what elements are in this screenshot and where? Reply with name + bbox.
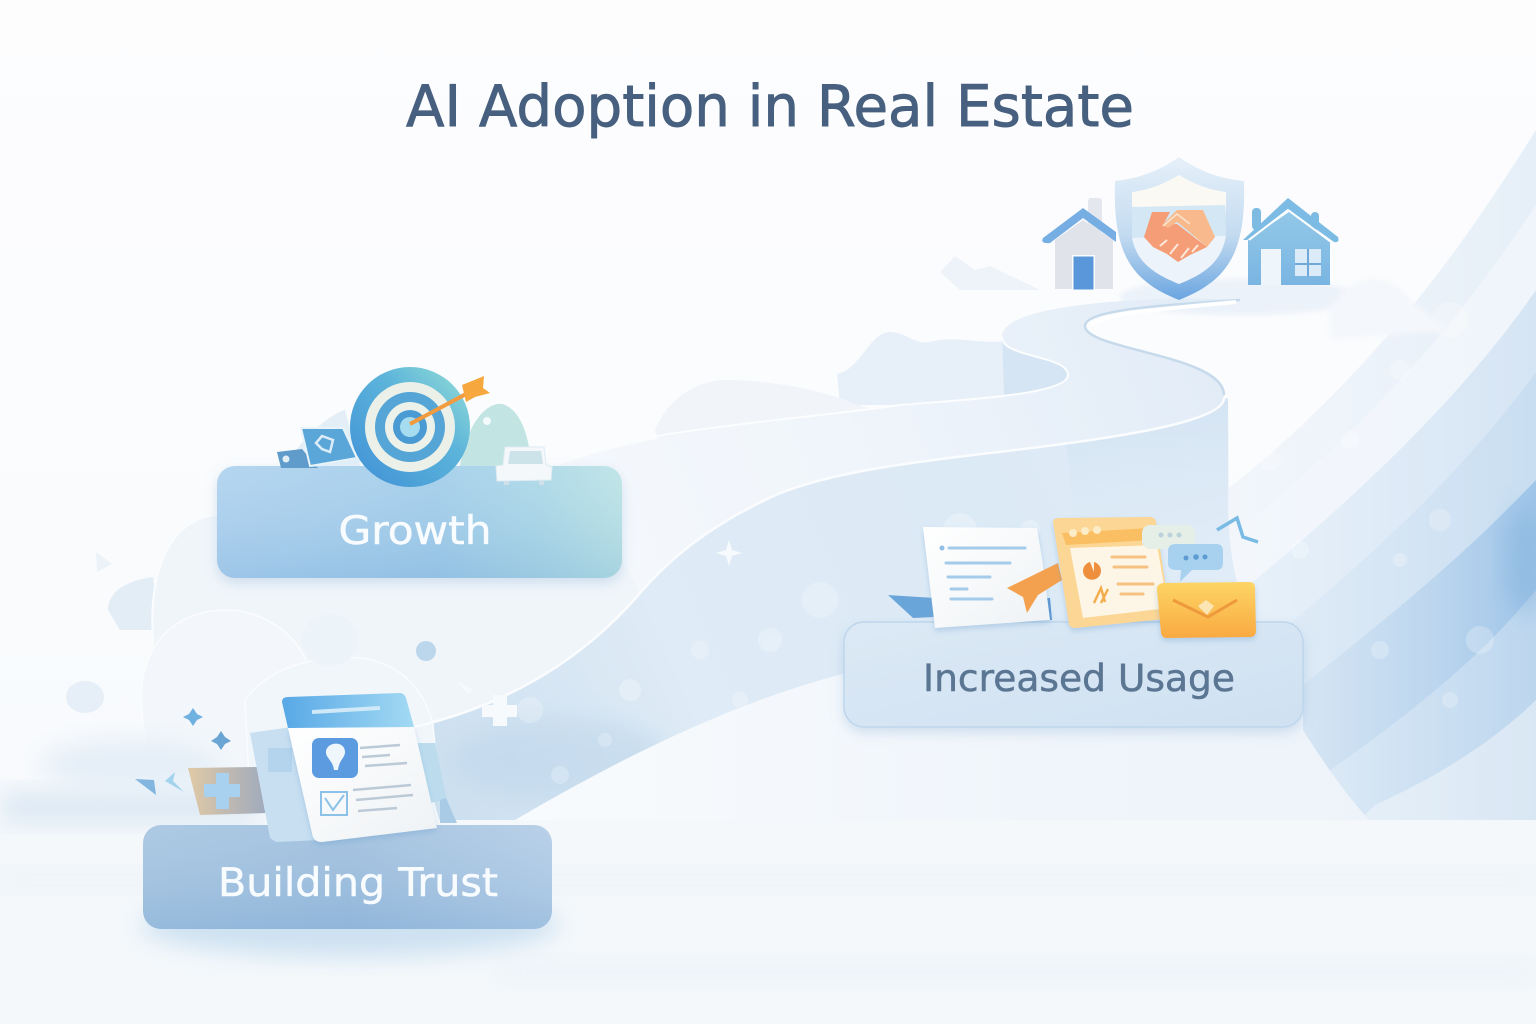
icon: arrows xyxy=(135,772,184,795)
hill and arch shapes on left xyxy=(66,480,640,800)
winding road xyxy=(414,298,1240,727)
faint sparkle and plus xyxy=(458,540,742,726)
icon: handshake xyxy=(1144,210,1215,262)
growth label: Growth xyxy=(338,509,492,554)
building trust label: Building Trust xyxy=(218,861,498,906)
panel: growth xyxy=(217,367,622,578)
title: AI Adoption in Real Estate xyxy=(406,74,1134,140)
left mist xyxy=(0,790,260,824)
icon: shield xyxy=(1115,157,1244,300)
pale ground xyxy=(0,820,1536,1024)
icon: hills behind target xyxy=(290,404,531,466)
icon: medical card xyxy=(188,767,267,815)
icon: sparkles xyxy=(183,708,231,750)
icon: browser window xyxy=(1053,517,1170,628)
distant clouds xyxy=(655,256,1450,445)
panel: increased usage xyxy=(844,517,1303,727)
road wall xyxy=(1066,398,1229,560)
icon: laptop and tag xyxy=(277,428,362,468)
panel: building trust xyxy=(135,693,560,957)
icon: envelope xyxy=(1157,582,1256,638)
icon: document with ribbon xyxy=(888,527,1062,628)
icon: houses and trust shield xyxy=(1042,157,1338,300)
small blue ball xyxy=(416,641,436,661)
lower pale road xyxy=(510,672,1372,823)
field darker mottled zone xyxy=(450,718,670,802)
usage label: Increased Usage xyxy=(923,657,1235,700)
icon: document report xyxy=(250,693,457,842)
mottled spots xyxy=(517,302,1494,784)
icon: speech bubbles xyxy=(1142,518,1258,582)
icon: target with arrow xyxy=(350,367,490,487)
icon: left house xyxy=(1042,198,1116,290)
icon: right house xyxy=(1243,198,1338,285)
blue field under the road xyxy=(414,400,1300,823)
icon: car xyxy=(496,447,552,485)
right swoosh bands xyxy=(1200,130,1536,820)
